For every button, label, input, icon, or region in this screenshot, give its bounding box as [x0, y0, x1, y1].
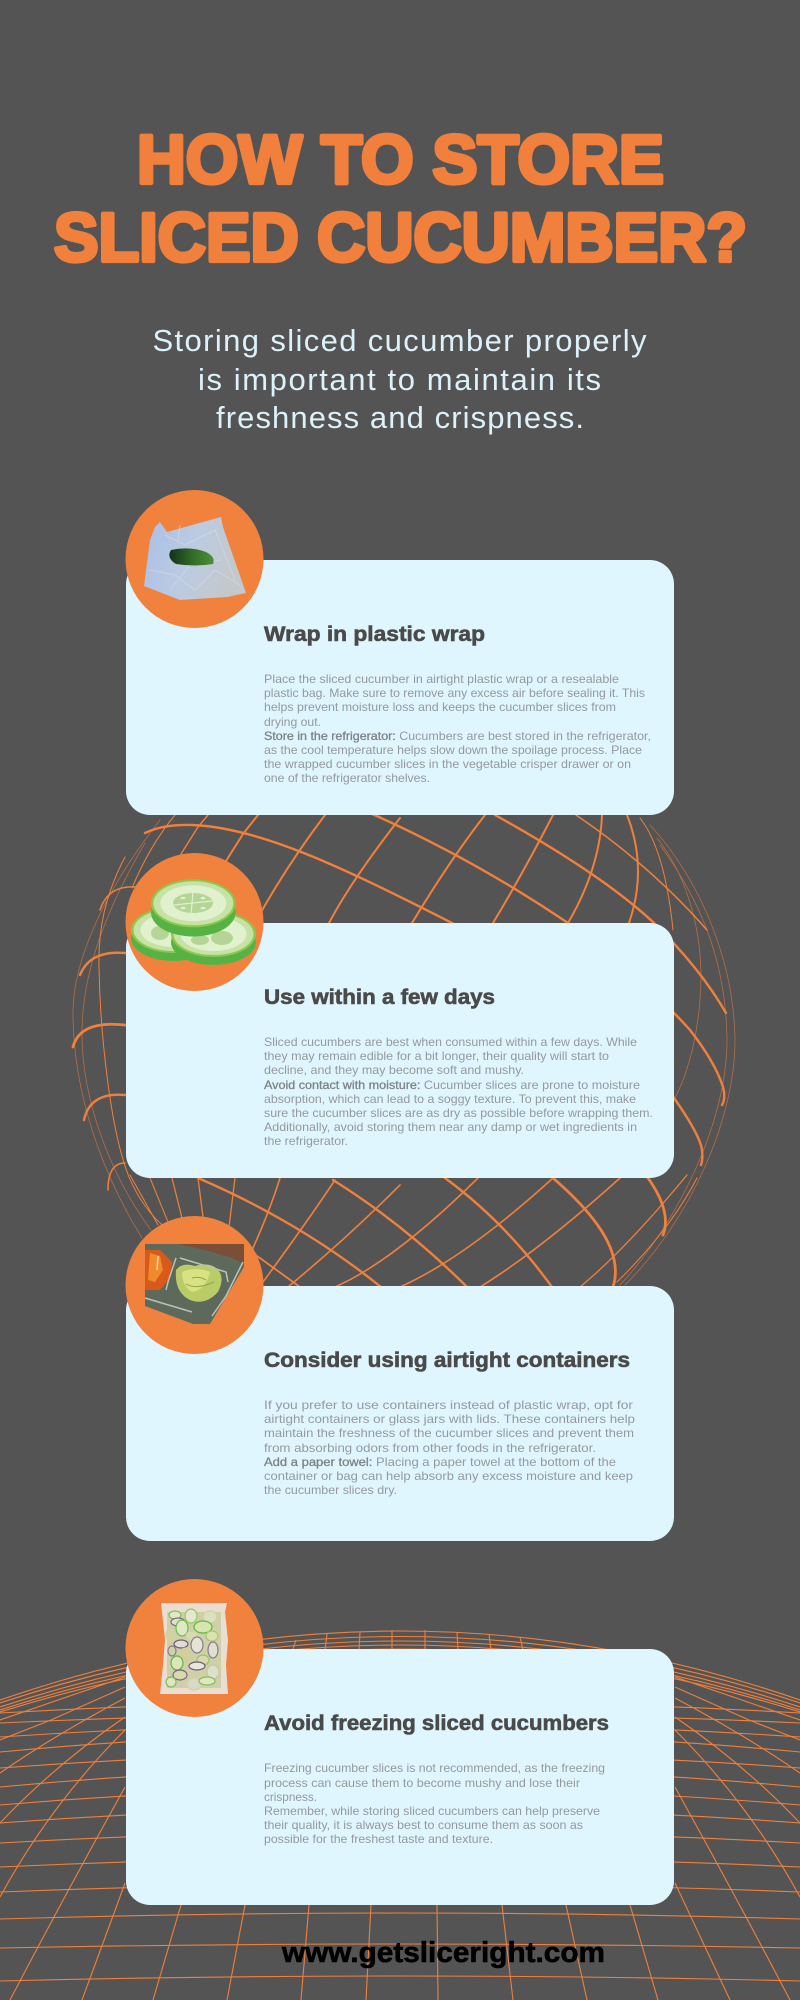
dome radial lines: [0, 1630, 800, 2000]
body text: Place the sliced cucumber in airtight plastic wrap or a resealable: [264, 673, 619, 686]
subtitle: Storing sliced cucumber properly: [152, 323, 647, 358]
dome latitude rows: [0, 1631, 800, 1981]
body text: maintain the freshness of the cucumber slices and prevent them: [264, 1427, 634, 1440]
left slice: [131, 907, 216, 961]
card background: [126, 1286, 674, 1541]
body text: Additionally, avoid storing them near any damp or wet ingredients in: [264, 1121, 637, 1134]
card background: [126, 923, 674, 1178]
card background: [126, 1649, 674, 1905]
panel: use within a few days: [126, 853, 674, 1178]
panel: avoid freezing sliced cucumbers: [126, 1579, 674, 1905]
body text: [264, 1036, 653, 1148]
body text: decline, and they may become soft and mushy.: [264, 1064, 524, 1077]
body text: Freezing cucumber slices is not recommended, as the freezing: [264, 1762, 605, 1775]
heading: Use within a few days: [264, 986, 495, 1009]
subtitle: is important to maintain its: [198, 362, 601, 397]
body text: Remember, while storing sliced cucumbers can help preserve: [264, 1805, 600, 1818]
title: SLICED CUCUMBER?: [54, 199, 747, 276]
body text: they may remain edible for a bit longer, their quality will start to: [264, 1050, 610, 1063]
body text: plastic bag. Make sure to remove any excess air before sealing it. This: [264, 687, 645, 700]
body text: the cucumber slices dry.: [264, 1484, 397, 1497]
title: HOW TO STORE: [137, 121, 664, 198]
heading: Wrap in plastic wrap: [264, 623, 485, 646]
icon: cucumber slices: [126, 853, 264, 991]
body text: [264, 1762, 605, 1846]
body text: possible for the freshest taste and texture.: [264, 1833, 493, 1846]
icon: freezer bag of cucumber slices: [126, 1579, 264, 1717]
body text: Avoid contact with moisture: Cucumber slices are prone to moisture: [264, 1079, 640, 1092]
body text: Store in the refrigerator: Cucumbers are best stored in the refrigerator,: [264, 730, 651, 743]
body text: from absorbing odors from other foods in the refrigerator.: [264, 1442, 596, 1455]
body text: Sliced cucumbers are best when consumed within a few days. While: [264, 1036, 637, 1049]
heading: Consider using airtight containers: [264, 1349, 630, 1372]
body text: as the cool temperature helps slow down the spoilage process. Place: [264, 744, 642, 757]
body text: Add a paper towel: Placing a paper towel at the bottom of the: [264, 1456, 616, 1469]
subtitle: [152, 323, 647, 435]
body text: process can cause them to become mushy and lose their: [264, 1777, 580, 1790]
body text: absorption, which can lead to a soggy texture. To prevent this, make: [264, 1093, 636, 1106]
subtitle: freshness and crispness.: [216, 400, 584, 435]
body text: If you prefer to use containers instead of plastic wrap, opt for: [264, 1399, 633, 1412]
right slice: [171, 911, 256, 965]
body text: [264, 673, 651, 785]
heading: Avoid freezing sliced cucumbers: [264, 1712, 609, 1735]
card background: [126, 560, 674, 815]
wireframe dome grid background: [0, 1630, 800, 2000]
footer url: www.getsliceright.com: [281, 1937, 605, 1969]
wireframe globe background: [73, 800, 735, 1288]
body text: crispness.: [264, 1791, 317, 1804]
title: [54, 121, 747, 276]
icon: cucumber on plastic wrap: [126, 490, 264, 628]
body text: sure the cucumber slices are as dry as possible before wrapping them.: [264, 1107, 653, 1120]
body text: the refrigerator.: [264, 1135, 348, 1148]
body text: [264, 1399, 636, 1497]
body text: their quality, it is always best to consume them as soon as: [264, 1819, 583, 1832]
body text: container or bag can help absorb any excess moisture and keep: [264, 1470, 634, 1483]
panel: wrap in plastic wrap: [126, 490, 674, 815]
top slice: [151, 879, 236, 936]
body text: helps prevent moisture loss and keeps the cucumber slices from: [264, 701, 616, 714]
body text: drying out.: [264, 716, 321, 729]
icon: airtight food tray: [126, 1216, 264, 1354]
body text: one of the refrigerator shelves.: [264, 772, 430, 785]
body text: the wrapped cucumber slices in the vegetable crisper drawer or on: [264, 758, 631, 771]
panel: consider using airtight containers: [126, 1216, 674, 1541]
body text: airtight containers or glass jars with lids. These containers help: [264, 1413, 636, 1426]
